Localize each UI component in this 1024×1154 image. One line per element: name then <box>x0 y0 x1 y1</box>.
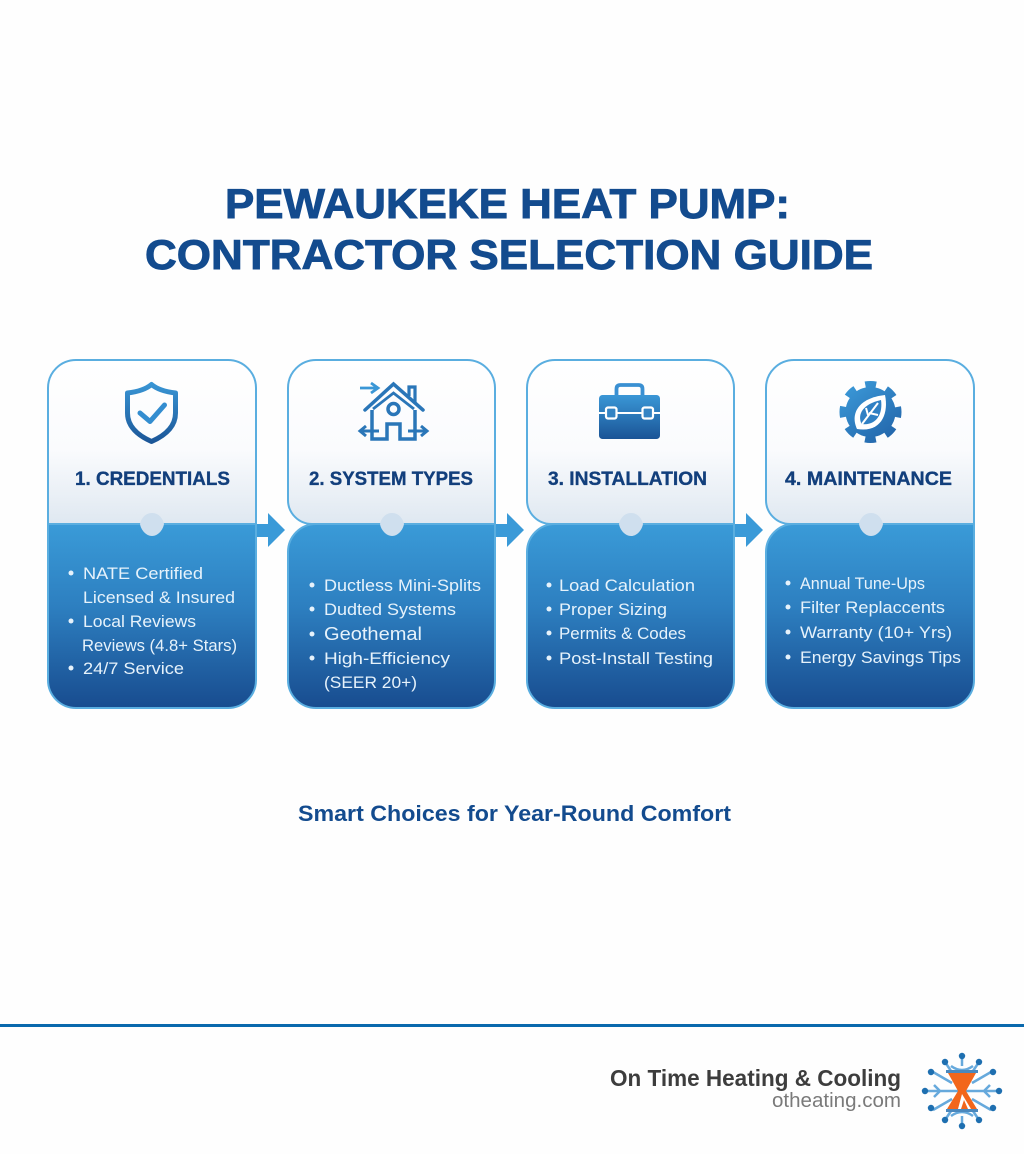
list: installation: Load Calculation <box>559 576 695 595</box>
list: credentials: Licensed & Insured <box>83 588 235 607</box>
arrow 3 <box>735 513 763 547</box>
footer band <box>0 1024 1024 1027</box>
heading: installation: 3. INSTALLATION <box>548 468 707 490</box>
arrow 1 <box>257 513 285 547</box>
arrow 2 <box>496 513 524 547</box>
list: installation: Post-Install Testing <box>559 649 713 668</box>
list: credentials: Reviews (4.8+ Stars) <box>82 636 237 655</box>
list: maintenance <box>786 574 961 667</box>
list: credentials: 24/7 Service <box>83 659 184 678</box>
heading: system types: 2. SYSTEM TYPES <box>309 468 473 490</box>
heading: credentials: 1. CREDENTIALS <box>75 468 230 490</box>
logo: snowflake hourglass <box>922 1053 1002 1129</box>
list: maintenance: Annual Tune-Ups <box>800 574 925 593</box>
connector node <box>619 513 643 536</box>
list: credentials: NATE Certified <box>83 564 203 583</box>
icon: house with airflow arrows <box>360 383 427 439</box>
list: system types: High-Efficiency <box>324 649 451 668</box>
list: system types: Ductless Mini-Splits <box>324 576 481 595</box>
title <box>145 180 873 278</box>
panel: installation <box>527 360 734 708</box>
panel: credentials <box>48 360 256 708</box>
list: installation <box>546 576 713 668</box>
tagline: Smart Choices for Year-Round Comfort <box>298 801 732 826</box>
icon: gear with leaf <box>844 385 898 439</box>
company name: On Time Heating & Cooling <box>610 1065 901 1091</box>
icon: toolbox <box>599 385 660 439</box>
list: maintenance: Filter Replaccents <box>800 598 945 617</box>
list: maintenance: Warranty (10+ Yrs) <box>800 623 952 642</box>
icon: shield with check <box>128 384 176 442</box>
panel: system types <box>288 360 495 708</box>
list: system types <box>310 576 481 692</box>
panel: maintenance <box>766 360 974 708</box>
title: CONTRACTOR SELECTION GUIDE <box>145 231 873 278</box>
connector node <box>859 513 883 536</box>
list: system types: Geothemal <box>324 623 422 644</box>
title: PEWAUKEKE HEAT PUMP: <box>225 180 790 227</box>
list: credentials: Local Reviews <box>83 612 196 631</box>
connector node <box>140 513 164 536</box>
list: maintenance: Energy Savings Tips <box>800 648 961 667</box>
list: installation: Permits & Codes <box>559 624 686 643</box>
list: installation: Proper Sizing <box>559 600 667 619</box>
heading: maintenance: 4. MAINTENANCE <box>785 468 952 490</box>
connector node <box>380 513 404 536</box>
company website: otheating.com <box>772 1090 901 1112</box>
list: system types: (SEER 20+) <box>324 673 417 692</box>
list: system types: Dudted Systems <box>324 600 456 619</box>
list: credentials <box>68 564 237 678</box>
